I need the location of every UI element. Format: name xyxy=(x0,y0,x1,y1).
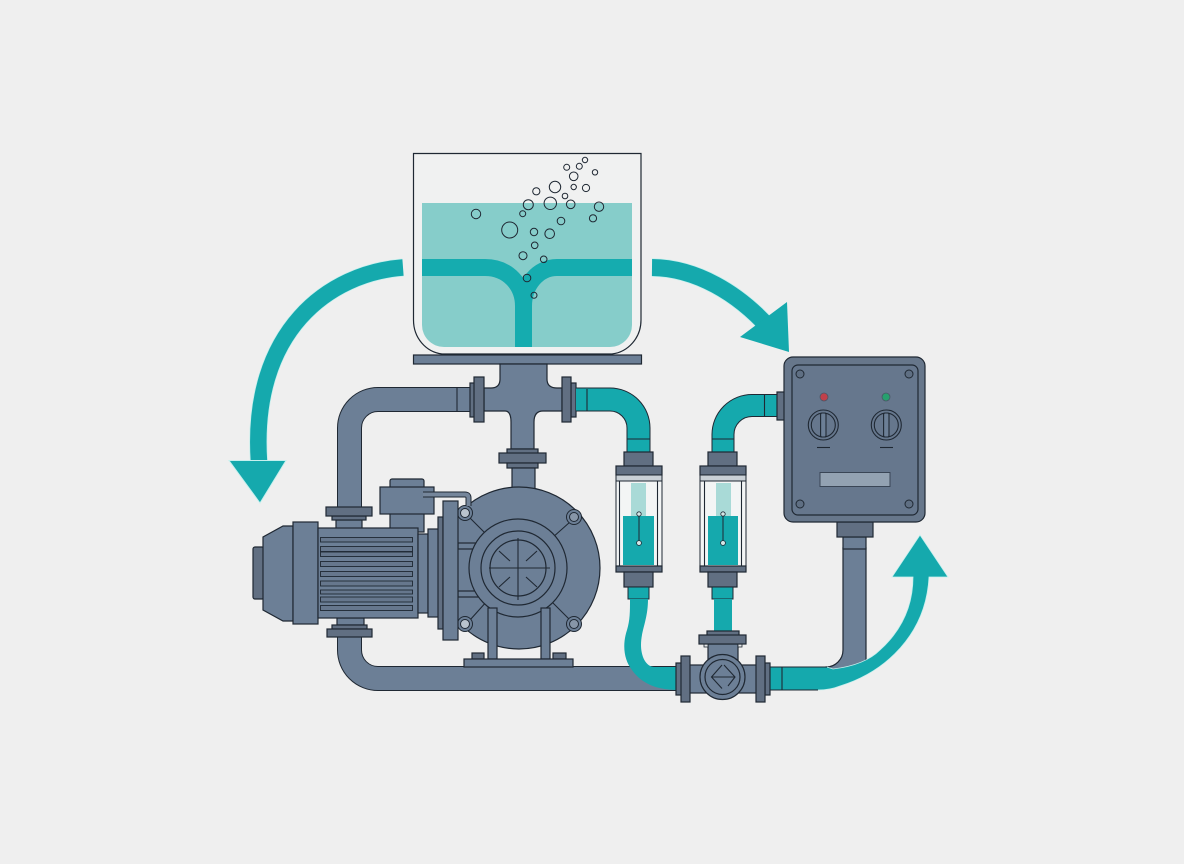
tank inner pipe xyxy=(422,268,524,347)
control box xyxy=(777,357,925,522)
flow arrow: teal outlet curving up xyxy=(770,535,948,690)
flowmeter right xyxy=(700,452,746,599)
small conduit xyxy=(423,494,468,506)
teal pipes below flowmeters xyxy=(624,599,732,690)
left flange xyxy=(470,383,475,417)
upper gray pipework xyxy=(350,364,576,508)
impeller rings xyxy=(469,519,567,617)
electric motor xyxy=(253,479,468,640)
display xyxy=(820,472,890,486)
motor mounts xyxy=(336,520,362,529)
coupling xyxy=(418,534,428,613)
centrifugal pump volute xyxy=(438,487,600,667)
knob left xyxy=(808,410,838,448)
outlet pipe edges xyxy=(770,667,827,690)
control box conduit xyxy=(826,522,873,680)
lower return pipe xyxy=(350,636,681,678)
motor end cap xyxy=(253,547,264,599)
indicator lights xyxy=(820,393,828,401)
flow arrow: tank to control box xyxy=(652,268,789,352)
outlet pipe seam xyxy=(781,667,783,690)
water tank xyxy=(414,154,641,354)
tank water xyxy=(422,203,632,347)
check valve xyxy=(676,631,770,702)
stem flange xyxy=(507,449,538,454)
screws xyxy=(796,370,804,378)
rising bubbles xyxy=(471,157,604,298)
bolts xyxy=(458,506,472,520)
flowmeter left xyxy=(616,452,662,599)
knob right xyxy=(871,410,901,448)
volute neck xyxy=(458,543,492,549)
teal supply pipes xyxy=(576,389,778,452)
pump feet xyxy=(488,608,497,659)
right flange xyxy=(571,383,576,417)
terminal box xyxy=(390,479,424,489)
motor body with fins xyxy=(318,528,418,618)
tank base plate xyxy=(414,355,642,364)
flow arrow: tank to pump xyxy=(229,268,403,503)
T junction xyxy=(484,364,562,449)
